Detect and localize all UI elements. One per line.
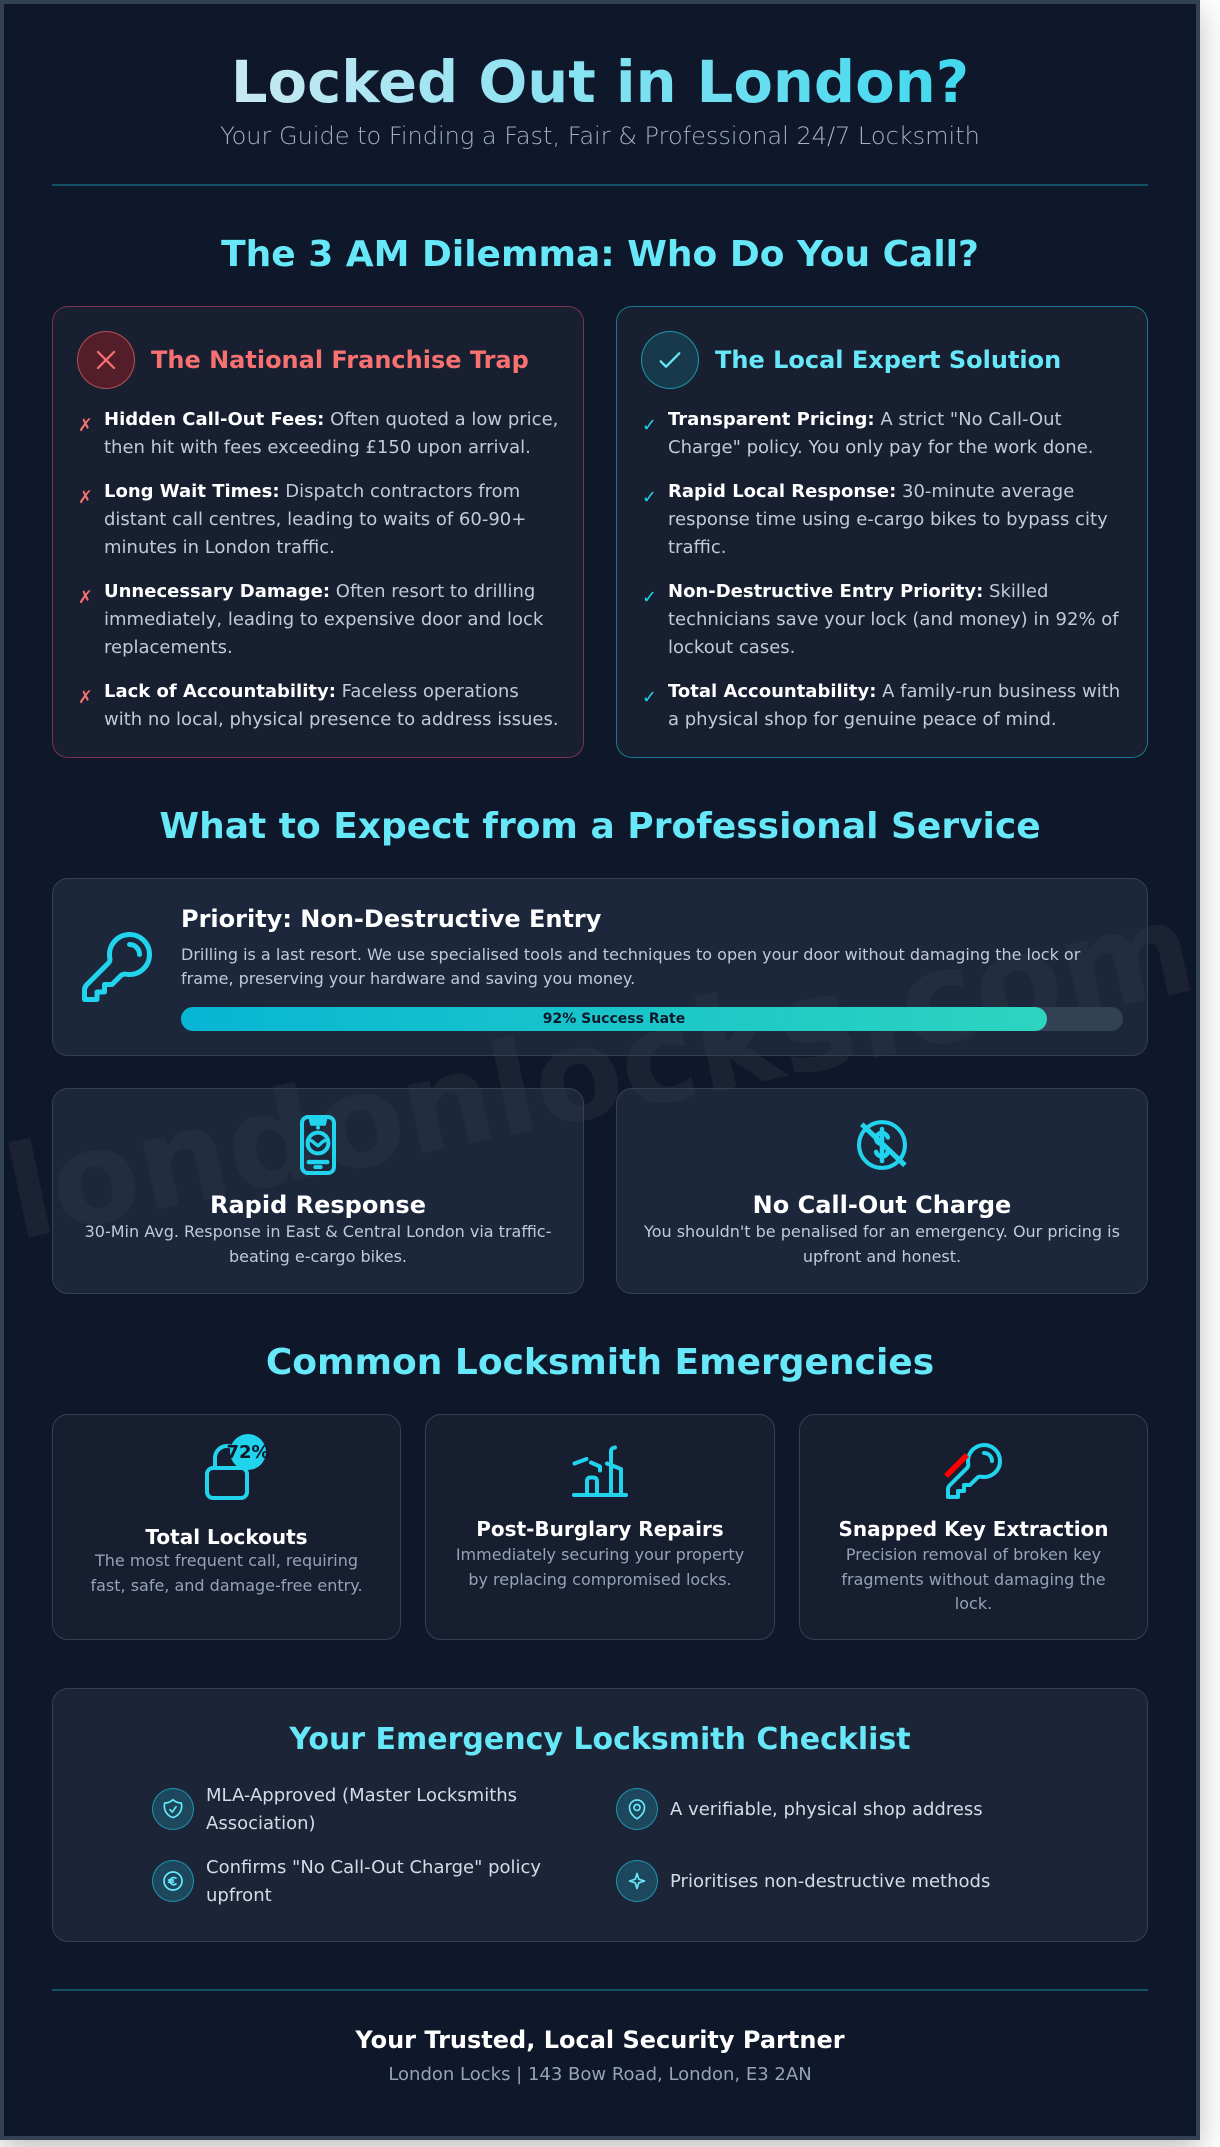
card text: The most frequent call, requiring fast, safe, and damage-free entry. (90, 1551, 363, 1594)
panel: local expert solution: ✓ (642, 588, 657, 608)
panel: local expert solution: ✓ (642, 488, 657, 508)
icon: cross (77, 331, 135, 389)
card text: Immediately securing your property by replacing compromised locks. (456, 1545, 744, 1588)
card heading: Rapid Response (210, 1191, 426, 1219)
panel: national franchise trap: ✗ (78, 588, 93, 608)
progress fill (181, 1007, 1047, 1031)
check: non-destructive (616, 1860, 990, 1902)
card text: Drilling is a last resort. We use specialised tools and techniques to open your door without damaging the lock or frame, preserving your hardware and saving you money. (181, 945, 1080, 988)
icon: snapped key (944, 1443, 1002, 1499)
icon: pin (616, 1788, 658, 1830)
icon: phone with clock (300, 1115, 336, 1175)
panel: national franchise trap: ✗ (78, 488, 93, 508)
panel: national franchise trap: ✗ (78, 688, 93, 708)
panel: national franchise trap (52, 306, 584, 758)
check: MLA (152, 1785, 517, 1834)
panel: post-burglary repairs (425, 1414, 775, 1640)
text: Confirms "No Call-Out Charge" policy upfront (206, 1857, 541, 1906)
panel: checklist (52, 1688, 1148, 1942)
panel: snapped key extraction (799, 1414, 1148, 1640)
progress fill: 92% Success Rate (543, 1011, 685, 1027)
icon: lock with 72% badge: 72% (226, 1442, 270, 1463)
card text: Precision removal of broken key fragments without damaging the lock. (841, 1545, 1106, 1613)
card heading: Total Lockouts (145, 1525, 308, 1549)
text: MLA-Approved (Master Locksmiths Association) (206, 1785, 517, 1834)
icon: check (641, 331, 699, 389)
heading: what to expect: What to Expect from a Professional Service (159, 806, 1041, 847)
heading: common emergencies: Common Locksmith Emergencies (266, 1342, 934, 1383)
card heading: No Call-Out Charge (753, 1191, 1011, 1219)
panel heading: The National Franchise Trap (151, 346, 529, 374)
item: pricing: Transparent Pricing: A strict "No Call-Out Charge" policy. You only pay for the work done. (668, 409, 1094, 458)
card heading: Snapped Key Extraction (838, 1517, 1109, 1541)
card text: You shouldn't be penalised for an emergency. Our pricing is upfront and honest. (644, 1222, 1120, 1266)
watermark: londonlocks.com (0, 873, 1200, 1270)
footer address: London Locks | 143 Bow Road, London, E3 2AN (388, 2064, 812, 2085)
text: Prioritises non-destructive methods (670, 1871, 990, 1892)
subtitle: Your Guide to Finding a Fast, Fair & Professional 24/7 Locksmith (220, 122, 980, 150)
panel heading: The Local Expert Solution (715, 346, 1061, 374)
text: A verifiable, physical shop address (670, 1799, 983, 1820)
panel: no call-out charge (616, 1088, 1148, 1294)
item: accountability: Total Accountability: A family-run business with a physical shop for genuine peace of mind. (668, 681, 1120, 730)
item: hidden fees: Hidden Call-Out Fees: Often quoted a low price, then hit with fees exceeding £150 upon arrival. (104, 409, 558, 458)
item: non-destructive: Non-Destructive Entry Priority: Skilled technicians save your lock (and money) in 92% of lockout cases. (668, 581, 1119, 658)
check: address (616, 1788, 983, 1830)
item: accountability: Lack of Accountability: Faceless operations with no local, physical presence to address issues. (104, 681, 559, 730)
panel: local expert solution: ✓ (642, 688, 657, 708)
footer heading: Your Trusted, Local Security Partner (355, 2026, 845, 2054)
title: Locked Out in London? (231, 49, 969, 116)
card text: 30-Min Avg. Response in East & Central London via traffic-beating e-cargo bikes. (85, 1222, 551, 1266)
card heading: Priority: Non-Destructive Entry (181, 905, 601, 933)
icon: no dollar (857, 1120, 907, 1170)
panel: non-destructive entry (52, 878, 1148, 1056)
heading: the 3 am dilemma: The 3 AM Dilemma: Who Do You Call? (221, 234, 979, 275)
card heading: Post-Burglary Repairs (476, 1517, 724, 1541)
icon: euro (152, 1860, 194, 1902)
icon: sparkle (616, 1860, 658, 1902)
item: wait times: Long Wait Times: Dispatch contractors from distant call centres, leading to waits of 60-90+ minutes in London traffic. (104, 481, 526, 558)
panel: total lockouts (52, 1414, 401, 1640)
panel: local expert solution: ✓ (642, 416, 657, 436)
panel: national franchise trap: ✗ (78, 416, 93, 436)
check: no call-out (152, 1857, 541, 1906)
item: damage: Unnecessary Damage: Often resort to drilling immediately, leading to expensive door and lock replacements. (104, 581, 543, 658)
icon: shield (152, 1788, 194, 1830)
checklist heading: Your Emergency Locksmith Checklist (289, 1722, 911, 1757)
icon: key (82, 932, 152, 1002)
panel: rapid response (52, 1088, 584, 1294)
item: response: Rapid Local Response: 30-minute average response time using e-cargo bikes to bypass city traffic. (668, 481, 1108, 558)
icon: lock with 72% badge (205, 1434, 270, 1500)
panel: local expert solution (616, 306, 1148, 758)
icon: damaged building (572, 1446, 628, 1497)
progress bar: 92% (181, 1007, 1123, 1031)
